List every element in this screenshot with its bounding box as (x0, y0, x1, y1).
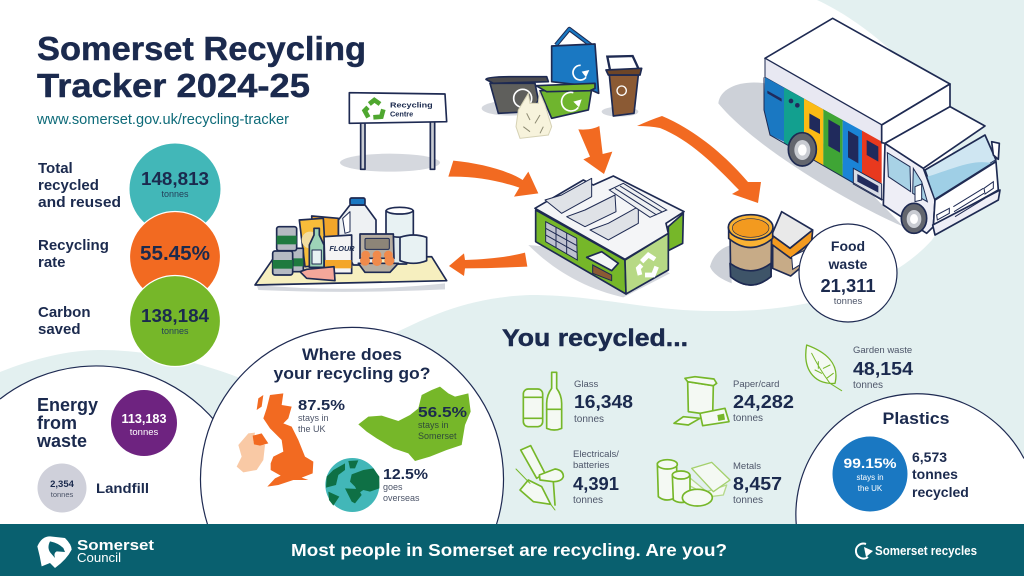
door and canopy (593, 265, 612, 281)
callout: food waste (799, 224, 897, 322)
plastics share circle: 99.15% (844, 455, 897, 471)
heading: you recycled: You recycled... (502, 325, 688, 352)
title: Somerset Recycling (37, 30, 366, 67)
cartons (299, 216, 338, 267)
title (37, 30, 366, 104)
mirror (992, 142, 999, 159)
arrow: bins to food waste (637, 116, 761, 203)
icon: jar and bottle (523, 372, 562, 430)
illustration: recycling centre sign: Recycling (390, 100, 433, 109)
arrow: bins to sorting centre (578, 126, 612, 174)
egg box (358, 234, 398, 272)
icon: recycling symbol (365, 100, 383, 117)
stat: carbon saved (38, 276, 220, 366)
stat: carbon saved: saved (38, 321, 81, 338)
where heading: Where does (302, 345, 402, 364)
stat: carbon saved: tonnes (161, 326, 189, 336)
stat: recycling rate: Recycling (38, 237, 109, 254)
panel: where does your recycling go (200, 327, 504, 525)
illustration: recycling truck (718, 18, 1000, 235)
item: metals: 8,457 (733, 474, 782, 494)
arrow: sorting centre to products (449, 253, 527, 276)
front wheel (901, 203, 927, 233)
paper rolls (386, 207, 427, 264)
item: glass: 16,348 (574, 392, 633, 412)
stat: recycling rate: rate (38, 254, 66, 271)
stat: recycling rate (38, 212, 220, 302)
stat: stays in the UK (298, 397, 345, 434)
item: electricals and batteries: tonnes (573, 495, 603, 506)
item: garden waste: 48,154 (853, 359, 913, 379)
icon: battery, hairdryer and iron (516, 446, 563, 510)
digester tank (728, 215, 773, 285)
stat: goes overseas (383, 466, 428, 503)
title: Tracker 2024-25 (37, 67, 310, 104)
callout: food waste: Food (831, 238, 865, 254)
stat: total recycled and reused: and reused (38, 194, 121, 211)
item: garden waste: Garden waste (853, 345, 912, 356)
stat: stays in Somerset: Somerset (418, 431, 457, 441)
panel: plastics: Plastics (882, 410, 950, 428)
stat: carbon saved: Carbon (38, 304, 90, 321)
energy from waste label: Energy (37, 395, 98, 415)
toothpaste tube (300, 267, 335, 281)
cargo front (882, 84, 950, 143)
stat: total recycled and reused (38, 144, 220, 234)
stat: stays in Somerset (418, 404, 467, 441)
stat: total recycled and reused: 148,813 (141, 169, 209, 189)
energy from waste figure: tonnes (130, 427, 159, 438)
stat: recycling rate: 55.45% (140, 243, 210, 265)
item: electricals and batteries: 4,391 (573, 474, 619, 494)
stat: carbon saved: 138,184 (141, 306, 209, 326)
energy from waste label: waste (36, 431, 87, 451)
milk bottle (338, 198, 376, 265)
illustration: household bins and bags (482, 29, 642, 138)
landfill figure: Landfill (96, 481, 149, 496)
icon: leaf (806, 345, 842, 391)
icon: recycling symbol on wall (638, 255, 657, 275)
rooftop vents (609, 183, 667, 217)
website link: www.somerset.gov.uk/recycling-tracker (36, 112, 289, 128)
item: electricals and batteries: batteries (573, 460, 610, 471)
rear wheel (788, 133, 816, 166)
item: garden waste (806, 345, 913, 391)
panel: energy from waste and landfill (0, 366, 252, 525)
item: electricals and batteries: Electricals/ (573, 449, 619, 460)
coloured compartments (764, 77, 882, 200)
item: garden waste: tonnes (853, 380, 883, 391)
landfill figure: 2,354 (50, 479, 75, 490)
logo: Somerset Council (37, 536, 154, 568)
stat: goes overseas: 12.5% (383, 466, 428, 483)
tins (273, 227, 303, 275)
illustration: sorting centre building (528, 176, 684, 297)
where heading: your recycling go? (274, 364, 430, 383)
slogan: Most people in Somerset are recycling. Are you? (291, 540, 727, 560)
icon: cans and foil trays (657, 460, 730, 506)
item: paper and card: Paper/card (733, 379, 779, 390)
illustration: food waste digester (710, 212, 813, 285)
digester box (772, 212, 813, 276)
cab side (883, 143, 935, 233)
stat: stays in the UK: stays in (298, 413, 329, 423)
stat: goes overseas: overseas (383, 493, 420, 503)
map: Somerset (358, 387, 471, 461)
brown caddy (602, 56, 642, 117)
plastics tonnage: recycled (912, 484, 969, 500)
cab front (933, 162, 998, 227)
cab roof (885, 107, 985, 168)
stat: stays in the UK: the UK (298, 424, 326, 434)
illustration: recycling centre sign: Centre (390, 110, 413, 119)
energy from waste label (36, 395, 98, 451)
cargo roof (765, 18, 950, 125)
icon: globe (325, 458, 379, 512)
item: glass (523, 372, 633, 430)
plastics share circle: stays in (856, 473, 884, 482)
illustration: recycled products on table (255, 198, 447, 292)
plastic bag (516, 92, 552, 138)
callout: food waste: tonnes (834, 296, 863, 307)
item: metals (657, 460, 782, 506)
illustration: recycling centre sign (340, 93, 447, 172)
stat: stays in Somerset: stays in (418, 420, 449, 430)
item: glass: Glass (574, 379, 599, 390)
map: UK and Ireland (237, 393, 313, 487)
stat: stays in the UK: 87.5% (298, 397, 345, 414)
windscreen (925, 135, 996, 198)
soap bottle (309, 228, 324, 267)
item: paper and card: tonnes (733, 413, 763, 424)
panel: plastics (796, 394, 1024, 525)
flour bag: FLOUR (329, 244, 355, 253)
item: metals: Metals (733, 461, 761, 472)
stat: goes overseas: goes (383, 482, 403, 492)
callout: food waste: 21,311 (820, 276, 876, 296)
where heading (274, 345, 430, 383)
plastics tonnage: 6,573 (912, 449, 947, 465)
footer banner (0, 524, 1024, 576)
icon: paper and card (674, 377, 729, 426)
plastics share circle: the UK (858, 484, 883, 493)
logo: Somerset Council: Council (77, 550, 121, 565)
landfill figure: tonnes (51, 490, 74, 499)
callout: food waste: waste (828, 256, 868, 272)
stat: total recycled and reused: recycled (38, 177, 99, 194)
landfill figure (38, 464, 149, 512)
stat: total recycled and reused: Total (38, 160, 73, 177)
green box (536, 83, 595, 118)
stat: total recycled and reused: tonnes (161, 189, 189, 199)
blue bag (552, 29, 599, 93)
item: metals: tonnes (733, 495, 763, 506)
item: glass: tonnes (574, 414, 604, 425)
skylights (545, 178, 638, 240)
plastics share circle (832, 436, 908, 512)
plastics tonnage: tonnes (912, 466, 958, 482)
energy from waste label: from (37, 413, 77, 433)
energy from waste figure: 113,183 (122, 412, 167, 426)
arrow: sign to sorting centre (448, 161, 538, 197)
item: paper and card: 24,282 (733, 392, 794, 412)
grey box (482, 77, 548, 116)
energy from waste figure (111, 390, 177, 456)
table (255, 257, 447, 285)
item: electricals and batteries (516, 446, 619, 510)
item: paper and card (674, 377, 794, 426)
logo: Somerset recycles: Somerset recycles (875, 544, 977, 558)
stat: stays in Somerset: 56.5% (418, 404, 467, 421)
window grid (546, 222, 577, 260)
logo: Somerset Council: Somerset (77, 537, 154, 554)
flour bag (324, 235, 355, 273)
plastics tonnage (912, 449, 969, 500)
